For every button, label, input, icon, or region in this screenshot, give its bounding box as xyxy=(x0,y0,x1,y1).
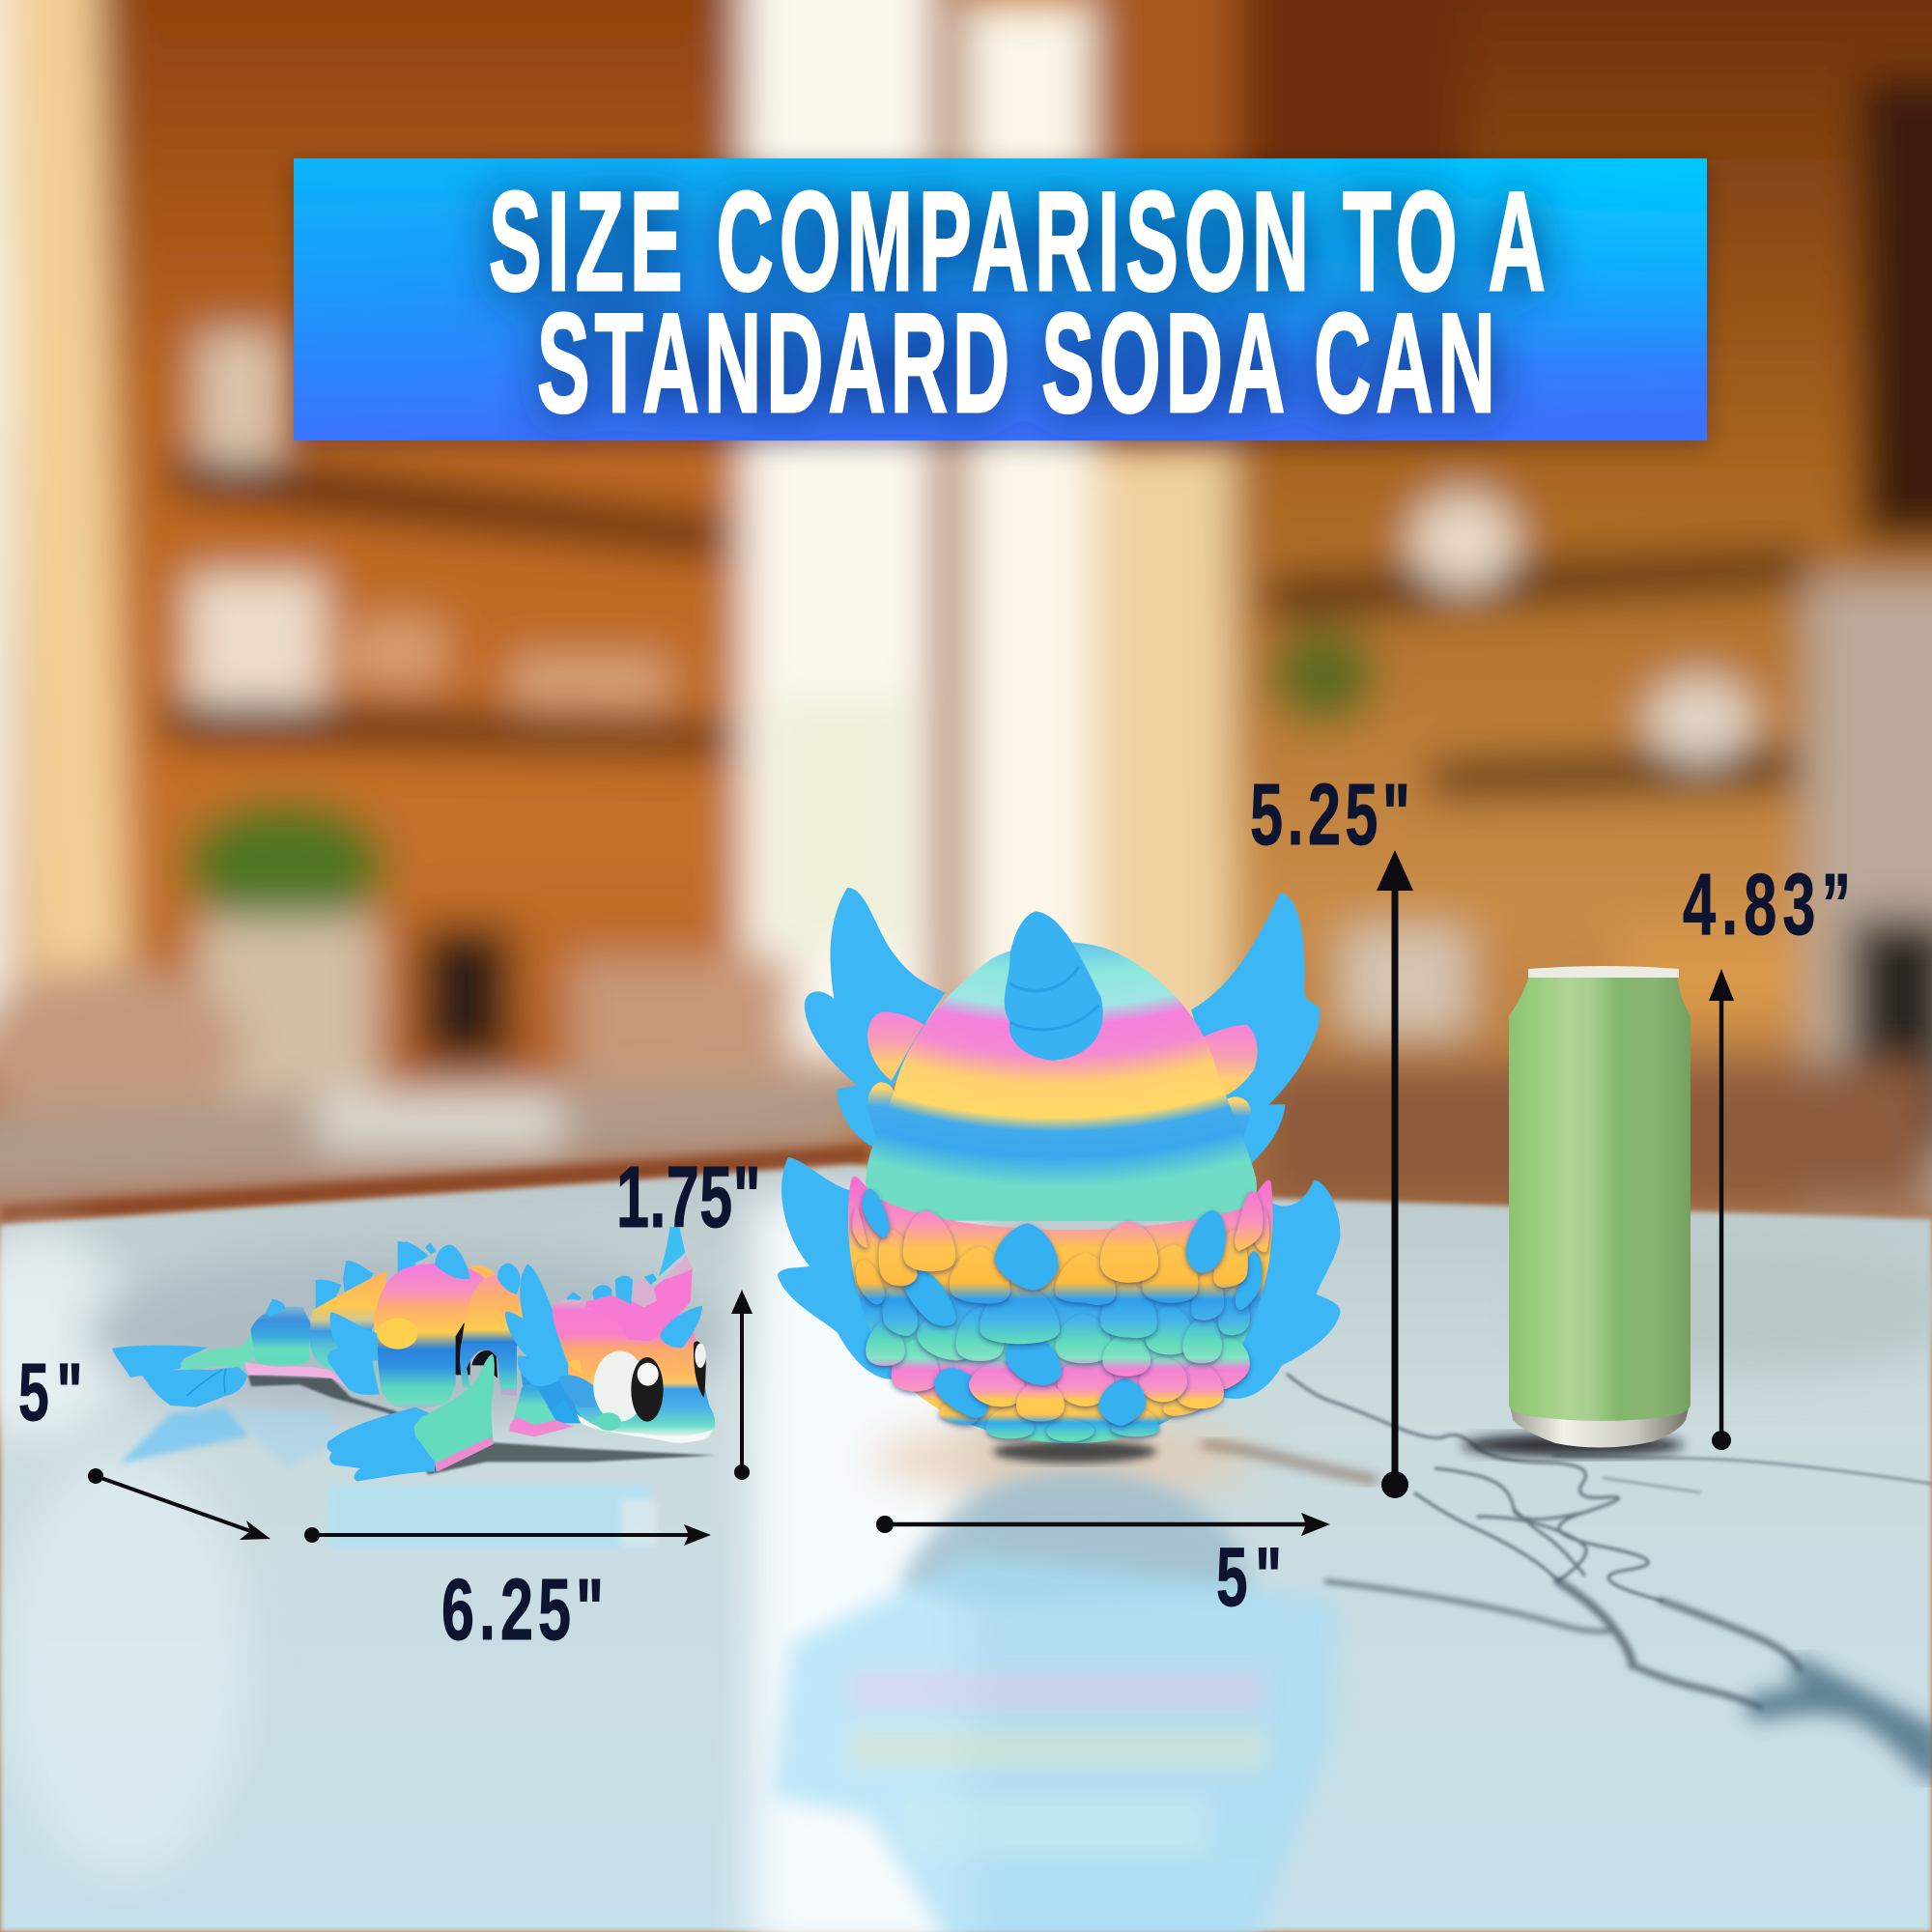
ear bump xyxy=(568,1360,582,1375)
wing on segment 2 xyxy=(327,1312,380,1395)
dark gap behind segment 3 xyxy=(451,1321,470,1375)
body segment 2 xyxy=(310,1270,387,1388)
front half of dragon xyxy=(399,1227,715,1471)
tail segment xyxy=(250,1307,311,1367)
title banner xyxy=(294,158,1707,440)
arrow: dragon height 1.75 xyxy=(731,1290,753,1480)
shoulder wing xyxy=(505,1264,568,1386)
front leg xyxy=(510,1384,573,1436)
upper left wing xyxy=(805,888,946,1148)
dragon shadows xyxy=(248,1375,715,1475)
back crest spikes xyxy=(567,1273,657,1307)
label 5.25: 5.25" xyxy=(1250,766,1410,864)
label 5 left: 5" xyxy=(18,1348,83,1438)
segment 4 spike xyxy=(497,1263,521,1294)
blue wedge xyxy=(549,1399,582,1423)
marble veins xyxy=(1204,1375,1932,1768)
dragon scales xyxy=(852,1188,1269,1441)
lip xyxy=(577,1413,713,1443)
arrow: dragon width 5 xyxy=(88,1468,270,1540)
neck xyxy=(519,1355,596,1420)
segment spikes xyxy=(399,1241,470,1279)
body segment 3 xyxy=(374,1264,491,1410)
eye xyxy=(593,1350,664,1422)
shadow under egg xyxy=(993,1440,1156,1463)
arrow: egg width 5 xyxy=(876,1513,1330,1536)
horn xyxy=(1005,911,1103,1061)
label 4.83: 4.83” xyxy=(1683,856,1851,953)
body spikes xyxy=(316,1241,415,1314)
lower left wing xyxy=(778,1157,900,1379)
egg reflection xyxy=(773,1470,1338,1932)
tall spike xyxy=(659,1227,685,1277)
arrow: egg height 5.25 xyxy=(1377,850,1413,1498)
upper right wing xyxy=(1191,894,1320,1167)
nostril bump xyxy=(596,1412,621,1431)
shoulder bump xyxy=(378,1319,417,1350)
soda can xyxy=(1462,966,1690,1457)
horn xyxy=(660,1306,702,1348)
crest xyxy=(586,1256,693,1341)
body orange rear xyxy=(470,1265,496,1292)
tail stem xyxy=(181,1328,255,1370)
articulated dragon xyxy=(112,1227,715,1548)
head xyxy=(553,1299,715,1441)
egg with wings xyxy=(778,888,1340,1463)
crest highlights xyxy=(631,1256,693,1307)
foot fingers xyxy=(327,1407,438,1481)
tail fin xyxy=(112,1346,247,1407)
tail fin creases xyxy=(186,1369,226,1396)
egg lower bowl xyxy=(848,1177,1273,1443)
belly gap xyxy=(471,1350,497,1378)
dragon reflections xyxy=(119,1407,657,1548)
tail underside xyxy=(244,1362,350,1389)
side scales xyxy=(867,1011,1258,1146)
label 1.75: 1.75" xyxy=(616,1149,761,1246)
cheek patch xyxy=(558,1375,596,1407)
label 5 right: 5" xyxy=(1216,1530,1282,1624)
title text: SIZE COMPARISON TO A xyxy=(489,163,1546,321)
tail spike xyxy=(266,1299,285,1317)
foot palm xyxy=(413,1354,495,1471)
body segment 4 xyxy=(460,1275,524,1396)
marble countertop xyxy=(0,1165,1932,1932)
lower right wing xyxy=(1208,1179,1340,1399)
egg top half xyxy=(866,942,1257,1221)
arrow: dragon length 6.25 xyxy=(304,1524,711,1546)
arrow: can height 4.83 xyxy=(1709,969,1734,1450)
title text xyxy=(489,163,1546,442)
foot pink edge xyxy=(435,1436,494,1471)
far eye xyxy=(694,1341,706,1398)
title text: STANDARD SODA CAN xyxy=(537,285,1495,442)
leg pink edge xyxy=(509,1417,573,1436)
label 6.25: 6.25" xyxy=(441,1561,604,1659)
